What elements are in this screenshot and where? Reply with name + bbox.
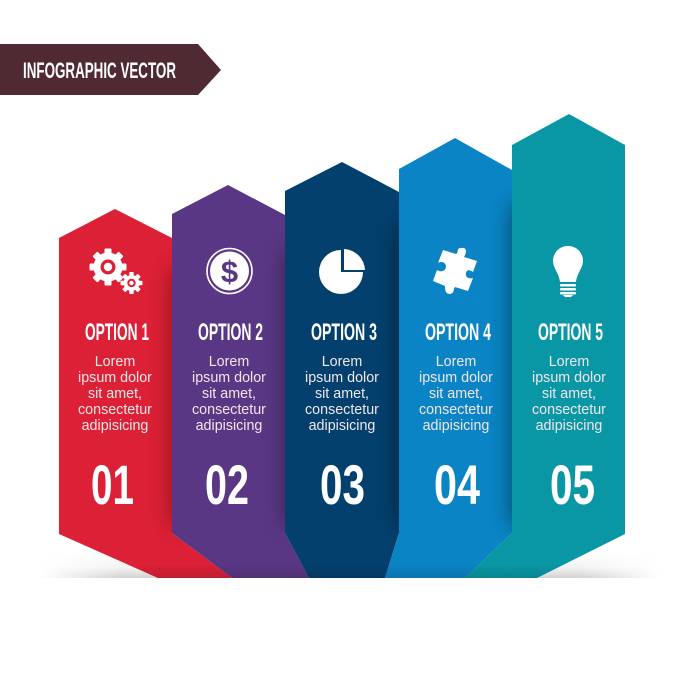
title banner: INFOGRAPHIC VECTOR (23, 58, 176, 83)
number 04: 04 (434, 453, 480, 516)
text block: option 5: adipisicing (536, 418, 602, 434)
panel: option 1 (59, 209, 232, 578)
text block: option 4: sit amet, (429, 386, 483, 402)
heading: option 4: OPTION 4 (425, 319, 491, 346)
ground shadow (40, 552, 660, 578)
text block: option 4: ipsum dolor (419, 370, 493, 386)
heading: option 3: OPTION 3 (311, 319, 377, 346)
number 03: 03 (320, 453, 365, 516)
blue arrow column (385, 138, 512, 578)
text block: option 4: adipisicing (423, 418, 489, 434)
icon: dollar coin: $ (221, 254, 238, 289)
icon: dollar coin (207, 248, 252, 294)
text block: option 3: consectetur (305, 402, 379, 418)
text block: option 5: ipsum dolor (532, 370, 606, 386)
text block: option 1: ipsum dolor (78, 370, 152, 386)
text block: option 3: Lorem (322, 354, 362, 370)
text block: option 5: sit amet, (542, 386, 596, 402)
navy arrow column (285, 162, 399, 578)
teal arrow column (465, 114, 625, 578)
text block: option 2: Lorem (209, 354, 249, 370)
icon: light bulb (553, 246, 583, 297)
text block: option 2: sit amet, (202, 386, 256, 402)
panel: option 4 (385, 138, 512, 578)
text block: option 2: adipisicing (196, 418, 262, 434)
text block: option 2: ipsum dolor (192, 370, 266, 386)
text block: option 3: adipisicing (309, 418, 375, 434)
text block: option 2: consectetur (192, 402, 266, 418)
base shading on columns (130, 564, 565, 578)
panel: option 2 (172, 185, 315, 578)
title banner (0, 44, 221, 95)
panel: option 3 (285, 162, 399, 578)
text block: option 4: Lorem (436, 354, 476, 370)
text block: option 3: sit amet, (315, 386, 369, 402)
icon: gears (90, 248, 142, 294)
heading: option 5: OPTION 5 (538, 319, 603, 346)
heading: option 1: OPTION 1 (85, 319, 149, 346)
number 02: 02 (205, 453, 249, 516)
icon: puzzle piece (433, 248, 477, 294)
icon: pie chart (319, 249, 365, 294)
red arrow column (59, 209, 232, 578)
text block: option 1: consectetur (78, 402, 152, 418)
text block: option 1: Lorem (95, 354, 135, 370)
heading: option 2: OPTION 2 (198, 319, 263, 346)
number 01: 01 (91, 453, 134, 516)
text block: option 4: consectetur (419, 402, 493, 418)
purple arrow column (172, 185, 309, 578)
text block: option 5: Lorem (549, 354, 589, 370)
text block: option 1: adipisicing (82, 418, 148, 434)
panel: option 5 (465, 114, 625, 578)
text block: option 5: consectetur (532, 402, 606, 418)
text block: option 3: ipsum dolor (305, 370, 379, 386)
number 05: 05 (550, 453, 595, 516)
text block: option 1: sit amet, (88, 386, 142, 402)
